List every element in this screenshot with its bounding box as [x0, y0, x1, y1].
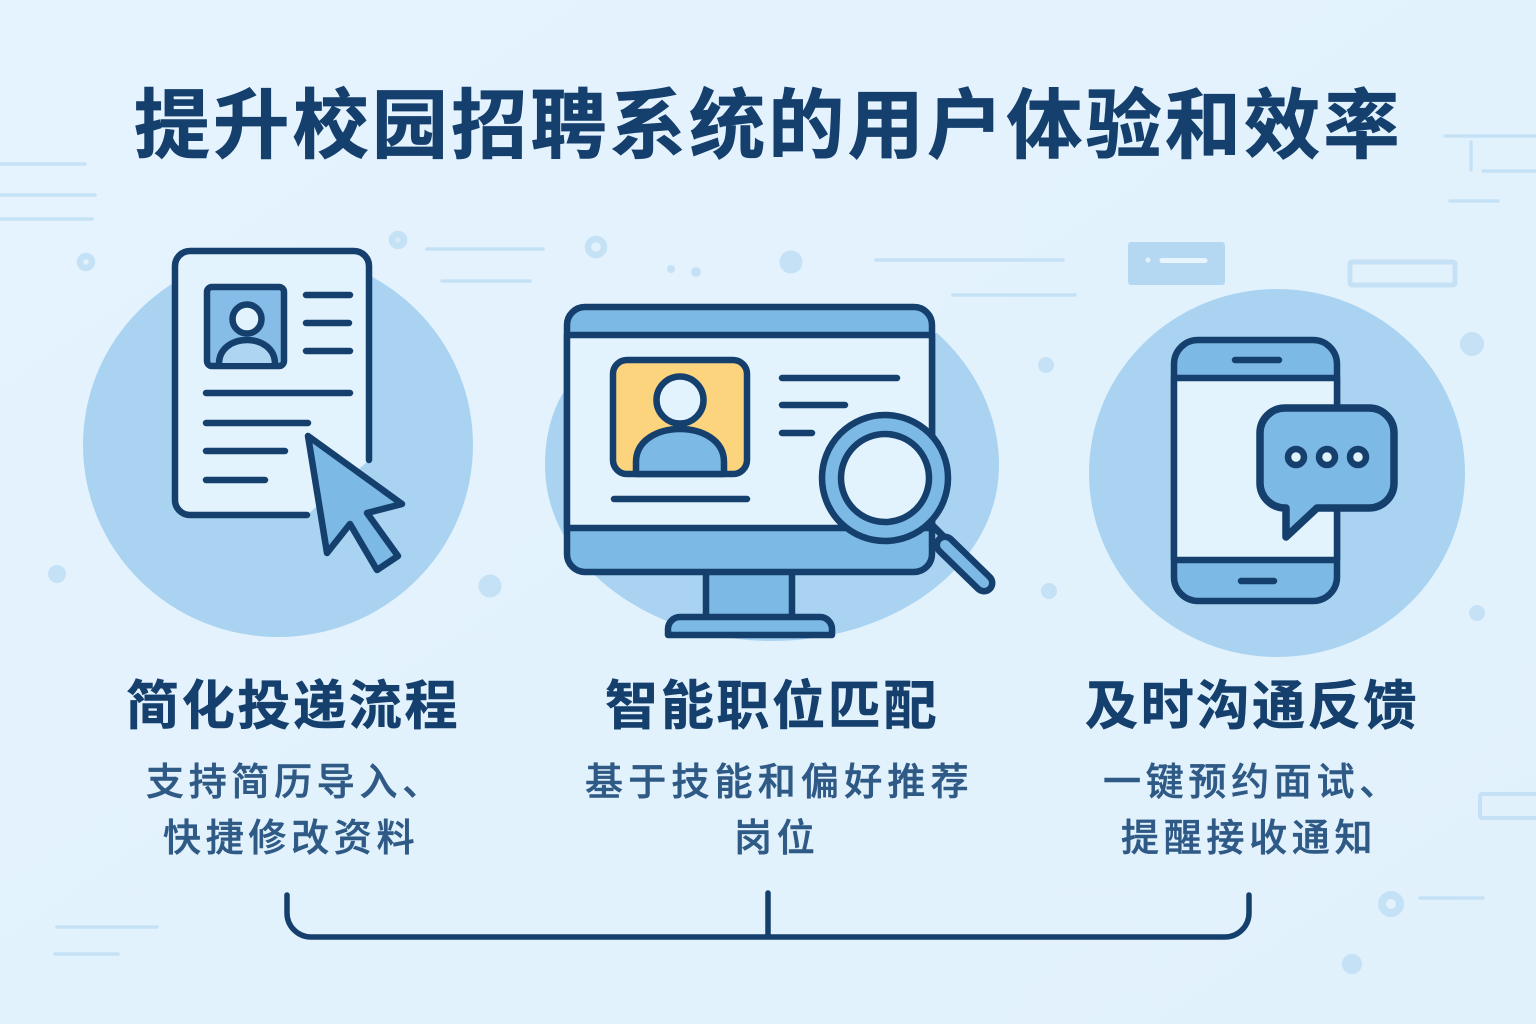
description: simplify application: 支持简历导入、 — [146, 762, 445, 804]
title: 提升校园招聘系统的用户体验和效率 — [134, 84, 1403, 169]
icon: magnifying glass — [822, 415, 984, 583]
icon backdrop circle — [1089, 289, 1465, 657]
description: simplify application — [146, 762, 445, 860]
icon: mouse cursor arrow — [308, 436, 402, 570]
icon: smartphone — [1174, 340, 1337, 601]
description: smart matching: 岗位 — [734, 818, 819, 860]
icon: chat bubble — [1260, 408, 1394, 537]
panel: simplify application icon — [83, 251, 473, 637]
description: timely communication — [1103, 762, 1402, 860]
icon: desktop monitor — [567, 307, 932, 635]
icon backdrop circle — [83, 253, 473, 637]
bracket connector — [287, 893, 1249, 937]
description: timely communication: 提醒接收通知 — [1121, 818, 1377, 860]
description: smart matching — [585, 762, 974, 860]
description: simplify application: 快捷修改资料 — [163, 818, 419, 860]
panel: timely communication icon — [1089, 289, 1465, 657]
heading: timely communication: 及时沟通反馈 — [1085, 677, 1419, 736]
description: timely communication: 一键预约面试、 — [1103, 762, 1402, 804]
icon backdrop circle — [545, 333, 999, 641]
heading: simplify application: 简化投递流程 — [126, 677, 460, 736]
description: smart matching: 基于技能和偏好推荐 — [585, 762, 974, 804]
panel: smart job matching icon — [545, 307, 999, 641]
heading: smart matching: 智能职位匹配 — [605, 677, 939, 736]
icon: resume document — [175, 251, 369, 515]
